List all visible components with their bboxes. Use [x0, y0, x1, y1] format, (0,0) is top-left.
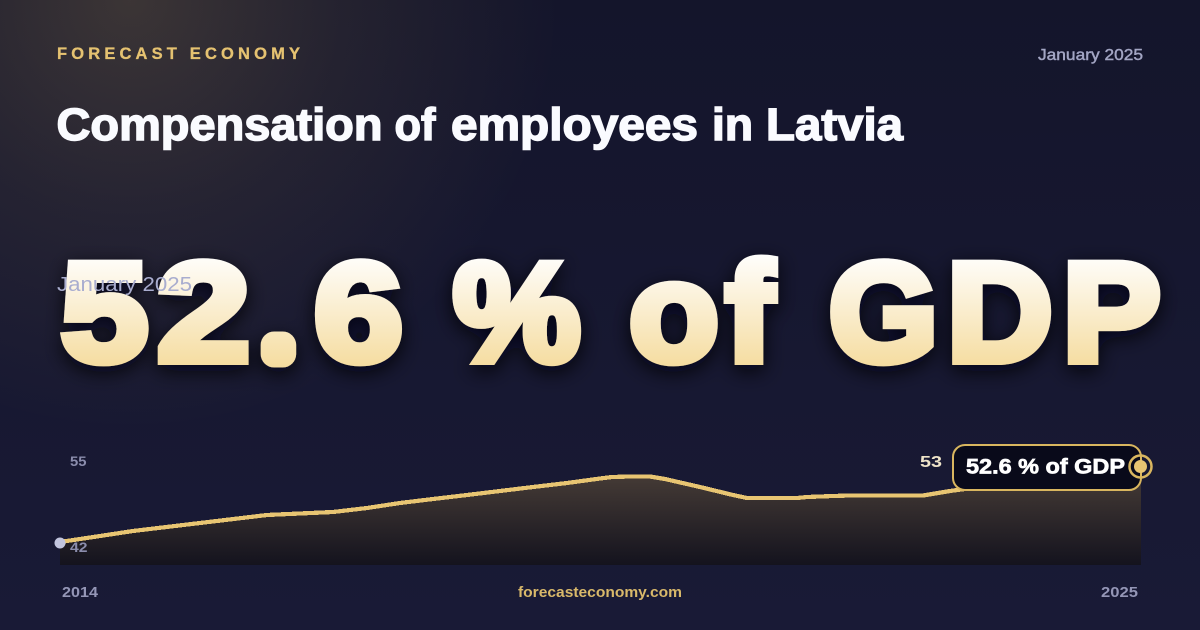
source site: forecasteconomy.com: [518, 584, 682, 601]
axis label: 55: 55: [70, 454, 87, 469]
title: Latvia: [766, 99, 904, 150]
hero value: o: [629, 234, 719, 390]
title: in: [712, 99, 753, 150]
title: Compensation: [56, 99, 382, 150]
chart line: [60, 467, 1140, 542]
title: employees: [451, 99, 698, 150]
hero value: G: [829, 234, 938, 390]
chart area fill: [60, 467, 1141, 565]
hero value: 5: [61, 234, 148, 390]
x-axis start year: 2014: [62, 584, 99, 601]
hero value: 2: [157, 234, 250, 390]
axis label: 42: 42: [70, 540, 88, 555]
eyebrow: brand name: FORECAST ECONOMY: [57, 45, 300, 63]
hero value: P: [1063, 234, 1161, 390]
hero value: %: [453, 234, 580, 390]
start point marker: [54, 538, 66, 548]
title: [56, 99, 904, 150]
area line chart: [54, 445, 1152, 565]
hero value: f: [726, 234, 774, 390]
hero value: [61, 234, 1161, 390]
x-axis end year: 2025: [1101, 584, 1138, 601]
hero value: D: [947, 234, 1053, 390]
value callout: 52.6 % of GDP: [966, 454, 1125, 478]
date top right: January 2025: [1038, 47, 1143, 64]
hero value: 6: [314, 234, 403, 390]
value callout: [953, 445, 1141, 490]
overlapping date label: January 2025: [57, 273, 192, 296]
axis label: 53: 53: [920, 454, 942, 471]
title: of: [394, 99, 436, 150]
end point marker: [1130, 456, 1152, 478]
hero value: .: [270, 300, 287, 367]
